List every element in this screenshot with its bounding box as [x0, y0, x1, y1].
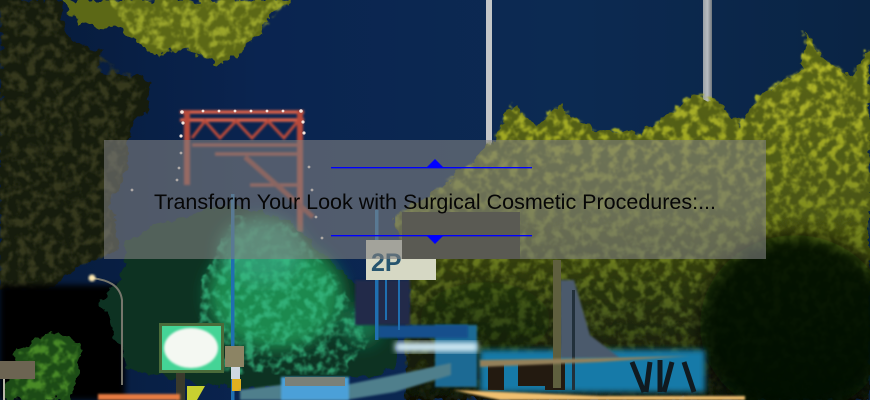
blue-lit road and river: [378, 325, 705, 392]
dark road sign back: [402, 212, 520, 259]
translucent title panel: [104, 140, 766, 259]
top divider line: [331, 167, 532, 168]
top triangle ornament: [427, 159, 443, 167]
bottom divider line: [331, 235, 532, 236]
lower-left bush: [5, 332, 84, 400]
right yellow-green tree canopy: [395, 30, 870, 400]
street lamp, left: [88, 274, 122, 385]
grey building and pole: [553, 260, 620, 390]
parking sign: [366, 240, 436, 280]
road bridge pilings: [488, 362, 565, 390]
blue sign poles: [231, 194, 400, 400]
red bridge tower: [180, 110, 313, 232]
small street signs: [0, 346, 244, 400]
car light trails: [98, 356, 745, 400]
bottom triangle ornament: [427, 236, 443, 244]
lower right trees in shadow: [420, 235, 870, 400]
tree trunks against water: [632, 360, 694, 392]
street lamp poles: [486, 0, 712, 160]
parking sign: 2P: [371, 249, 402, 277]
tower lights: [131, 109, 323, 239]
illuminated billboard: [159, 323, 224, 400]
dark left tree: [0, 0, 150, 290]
title: Transform Your Look with Surgical Cosmetic Procedures:...: [154, 190, 716, 214]
blue building behind sign: [355, 280, 410, 325]
bridge railing and car: [240, 363, 451, 400]
dark lower-left area: [0, 285, 125, 400]
overhanging yellow-green branch: [60, 0, 298, 65]
central green tree: [100, 205, 395, 390]
